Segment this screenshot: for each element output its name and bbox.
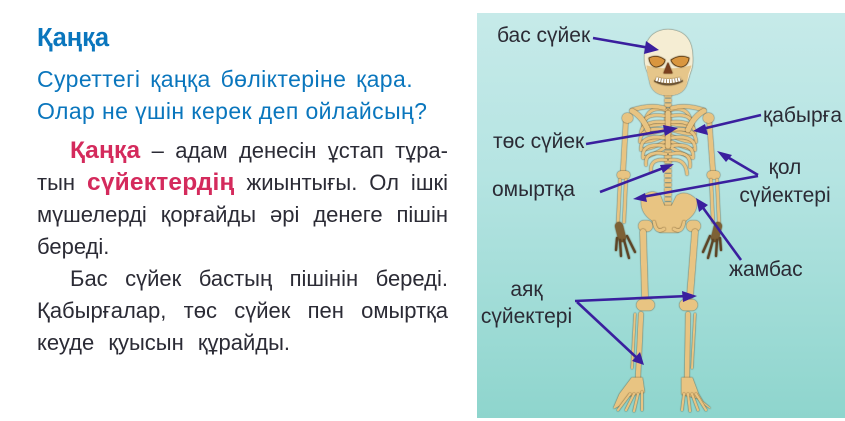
rib cage [640,109,696,174]
body text: skull and ribs paragraph [37,266,448,355]
title: Қаңқа [37,24,109,52]
pelvis [642,192,696,232]
label: қол сүйектері: қол [769,156,801,179]
arrow: қол сүйектері upper [717,151,758,175]
skull [645,30,692,95]
feet [614,378,710,411]
panel: skeleton illustration background [477,13,845,418]
clavicles and shoulders [632,106,704,130]
label: аяқ сүйектері: сүйектері [481,305,572,328]
label: қол сүйектері [739,156,831,207]
body text: skull and ribs paragraph: Қабырғалар, төс сүйек пен омыртқа [37,298,448,323]
arrow: қол сүйектері lower [633,176,758,202]
body text: definition paragraph: тын сүйектердің жиынтығы. Ол ішкі [37,169,448,196]
label: бас сүйек: бас сүйек [497,24,590,47]
arrow: жамбас [696,198,741,260]
spine [664,94,672,210]
label: аяқ сүйектері [481,278,572,328]
arrow: қабырға [693,115,761,135]
question text [37,66,427,124]
label: аяқ сүйектері: аяқ [510,278,543,301]
arrow: төс сүйек [586,125,678,144]
arrow: аяқ сүйектері upper [575,291,697,302]
arrow: омыртқа [600,164,674,192]
label: жамбас: жамбас [729,258,803,281]
body text: skull and ribs paragraph: Бас сүйек бастың пішінін береді. [70,266,448,291]
leg bones [632,226,695,378]
question text: Суреттегі қаңқа бөліктеріне қара. [37,66,413,92]
label: қол сүйектері: сүйектері [739,184,831,207]
question text: Олар не үшін керек деп ойлайсың? [37,98,427,124]
arrow: бас сүйек [593,38,659,54]
arrows [575,38,761,365]
body text: definition paragraph: Қаңқа – адам денесін ұстап тұра- [70,137,448,164]
arrow: аяқ сүйектері lower [577,302,644,365]
body text: skull and ribs paragraph: кеуде қуысын құрайды. [37,330,290,355]
label: төс сүйек: төс сүйек [493,130,584,153]
hands [616,226,721,258]
label: қабырға: қабырға [763,104,842,127]
label: омыртқа: омыртқа [492,178,575,201]
body text: definition paragraph [37,137,448,259]
body text: definition paragraph: береді. [37,234,109,259]
body text: definition paragraph: мүшелерді қорғайды әрі денеге пішін [37,202,448,227]
arm bones [618,118,719,222]
sternum [666,113,670,146]
